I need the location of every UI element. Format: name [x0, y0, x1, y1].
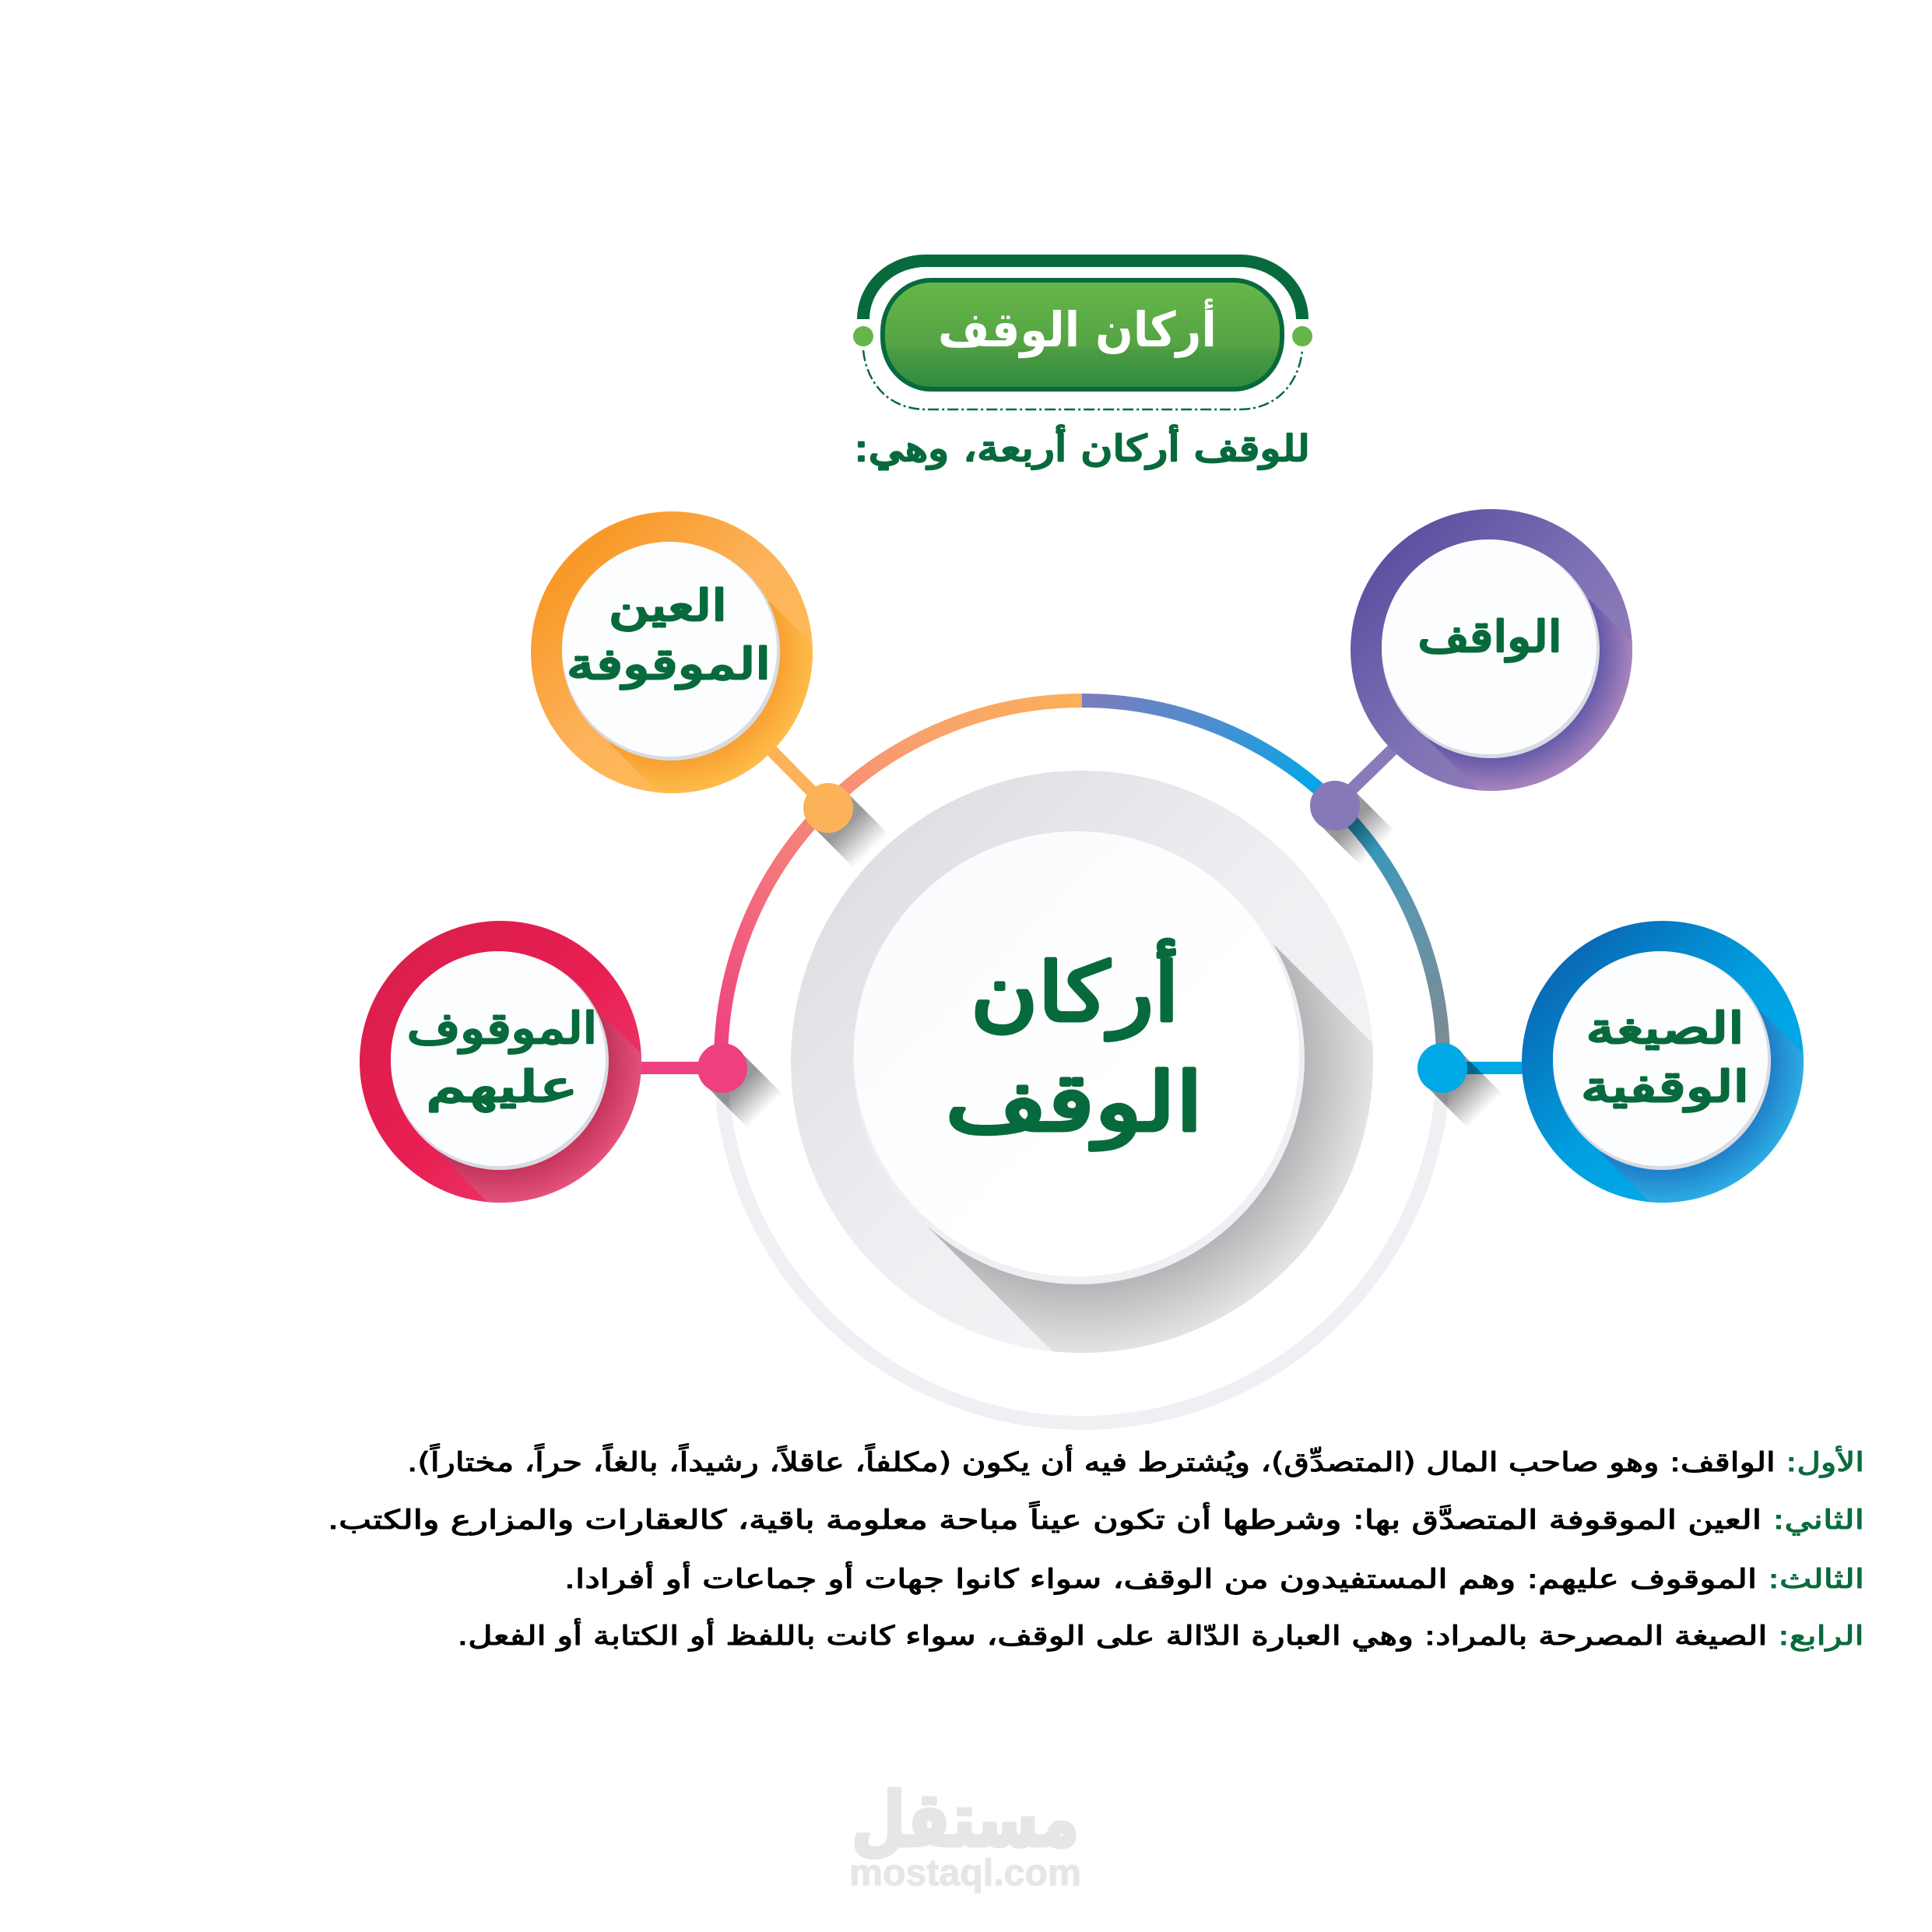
dot shadow	[811, 791, 888, 868]
dot: orange	[803, 783, 888, 868]
dot: blue	[1417, 1043, 1502, 1128]
outer ring	[721, 701, 1443, 1423]
node: red	[360, 921, 641, 1203]
line 3: الثالث: الموقوف عليهم: وهم المستفيدون من الوقف، سواء كانوا جهات أو جماعات أو أفرادا.	[564, 1561, 1864, 1595]
dot	[697, 1043, 747, 1093]
node: blue	[1522, 921, 1804, 1203]
label line 2: الموقوفة	[567, 639, 771, 689]
white face	[1382, 539, 1597, 754]
white face	[391, 951, 606, 1166]
ring shadow	[438, 1010, 641, 1203]
dot	[1417, 1043, 1467, 1093]
title text: أركان الوقف	[938, 298, 1217, 358]
connector: purple	[1335, 747, 1395, 806]
ring shadow	[1429, 599, 1632, 791]
connector: pink	[634, 1062, 722, 1074]
line 4: الرابع: الصيغة المصرحة بالمراد: وهي العبارة الدّالة على الوقف، سواء كانت باللفظ أو الكتابة أو الفعل.	[458, 1618, 1864, 1652]
ring	[1522, 921, 1804, 1203]
label line 1: العين	[609, 581, 727, 631]
green pill button	[883, 280, 1282, 389]
ring shadow	[609, 601, 813, 793]
dot shadow	[705, 1051, 782, 1128]
label line 1: الموقوف	[407, 1003, 597, 1053]
subtitle: للوقف أركان أربعة، وهي:	[854, 425, 1310, 470]
centre title line 1: أركان	[971, 940, 1179, 1040]
label line 2: الوقفية	[1581, 1062, 1749, 1112]
white disc	[854, 831, 1299, 1277]
dot: purple	[1310, 781, 1395, 866]
ring lower half	[721, 1062, 1443, 1423]
watermark arabic logo: مستقل	[852, 1776, 1079, 1864]
long shadow	[927, 943, 1373, 1353]
dot shadow	[1318, 789, 1395, 866]
ring upper-right arc	[1082, 701, 1443, 1062]
rim	[1382, 540, 1600, 758]
line 2: الثاني: العين الموقوفة المتصدَّق بها: وشرطها أن تكون عيناً مباحة معلومة باقية، كالعقارات والمزارع والكتب.	[328, 1501, 1864, 1536]
dash-dot lower outline	[863, 350, 1302, 409]
node: purple	[1351, 509, 1632, 791]
title badge	[853, 261, 1312, 409]
dot	[1310, 781, 1360, 831]
top arc	[863, 261, 1302, 319]
centre title line 2: الوقف	[945, 1055, 1203, 1150]
ring	[360, 921, 641, 1203]
connector: orange	[767, 746, 828, 808]
ring shadow	[1600, 1010, 1804, 1203]
dot	[803, 783, 853, 833]
node: orange	[531, 511, 813, 793]
watermark	[849, 1776, 1081, 1894]
ring	[531, 511, 813, 793]
left green dot	[853, 326, 873, 346]
label: الواقف	[1418, 612, 1561, 662]
body text	[328, 1443, 1864, 1652]
centre disc	[791, 771, 1373, 1353]
disc rim	[853, 833, 1305, 1284]
rim	[391, 952, 609, 1170]
white face	[562, 542, 777, 757]
connector: blue	[1442, 1062, 1530, 1074]
grey disc	[791, 771, 1373, 1353]
watermark url: mostaql.com	[849, 1853, 1081, 1894]
line 1: الأول: الواقف: وهو صاحب المال (المتصدِّق)، ويُشترط فيه أن يكون (مكلفاً، عاقلاً، رشيداً، بالغاً، حراً، مختاراً).	[407, 1443, 1864, 1478]
white face	[1553, 951, 1768, 1166]
right green dot	[1292, 326, 1312, 346]
rim	[1553, 952, 1771, 1170]
label line 2: عليهم	[427, 1062, 578, 1112]
dot shadow	[1425, 1051, 1502, 1128]
rim	[562, 543, 780, 761]
dot: pink	[697, 1043, 782, 1128]
ring upper-left arc	[721, 701, 1082, 1062]
ring	[1351, 509, 1632, 791]
label line 1: الصيغة	[1586, 1003, 1744, 1053]
